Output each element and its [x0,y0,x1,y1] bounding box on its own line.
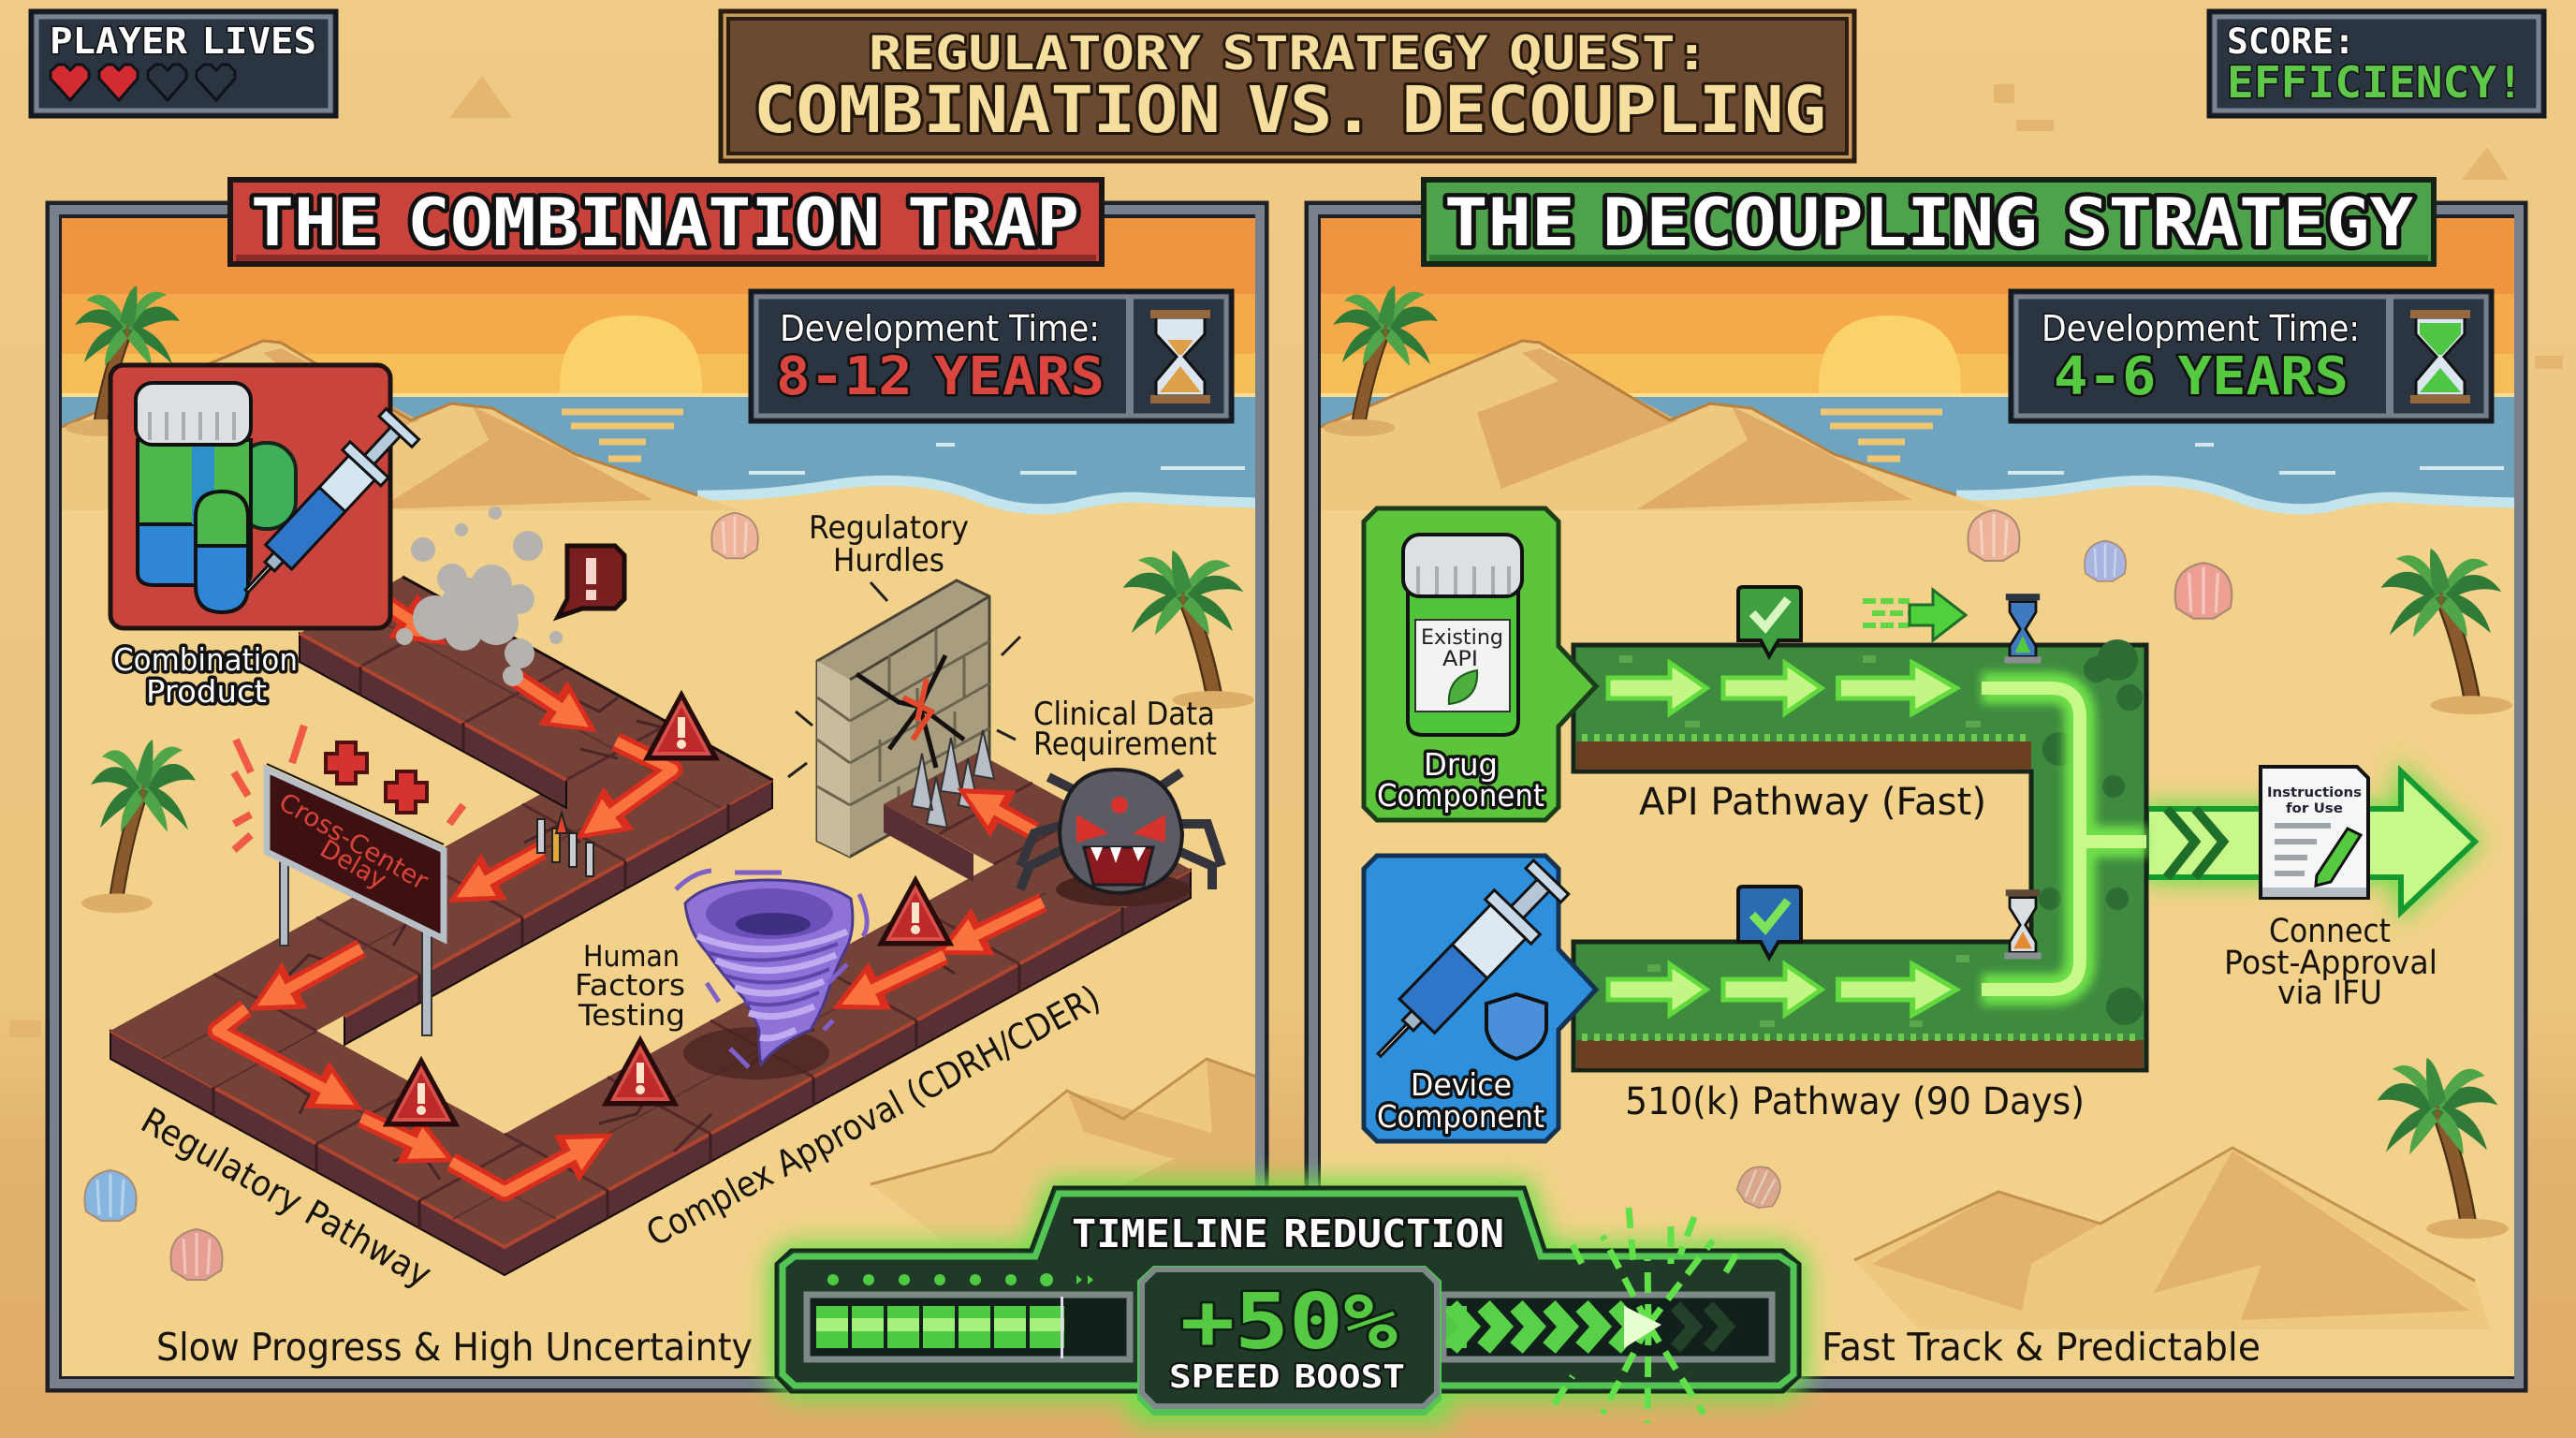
smoke cloud [330,506,563,686]
score panel [2209,11,2544,116]
path segment: middle stretch [110,724,772,1088]
existing API bottle [1403,535,1522,735]
red path arrows [217,599,1043,1192]
drug component tile [1364,508,1596,820]
score panel: SCORE: [2227,22,2355,62]
label: regulatory pathway: Regulatory Pathway [135,1100,438,1296]
title: timeline reduction: TIMELINE REDUCTION [1072,1211,1504,1256]
label: connect post-approval: Post-Approval [2224,945,2437,982]
syringe [227,406,421,609]
path segment: spider stretch [884,753,1191,921]
human factors tornado [676,871,867,1079]
label: regulatory hurdles: Regulatory [809,509,969,547]
label: human factors testing: Human [583,940,680,974]
caption: fast track: Fast Track & Predictable [1822,1325,2261,1370]
label: combination product [113,641,298,710]
player lives panel [31,11,336,116]
progress dots [827,1273,1093,1286]
medicine bottle [136,383,251,585]
label: regulatory hurdles [809,509,969,601]
boss spider [1020,770,1222,906]
palm trees [66,286,1254,913]
instructions for use document [2261,767,2368,898]
panel: combination trap [54,180,1260,1384]
left progress bar [807,1295,1130,1359]
label: API pathway: API Pathway (Fast) [1639,781,1986,824]
label: human factors testing: Testing [578,999,685,1033]
label: complex approval: Complex Approval (CDRH/CDER) [639,977,1106,1255]
decorative sand marks [9,76,2563,1037]
hearts [51,65,235,100]
drug component tile: Component [1377,777,1544,814]
right panel scene [1321,218,2515,1376]
icon: hourglass green [2410,310,2470,404]
icon: hourglass [1150,310,1210,404]
device component tile: Device [1411,1066,1512,1103]
shield [1486,994,1546,1059]
capsule [196,492,248,612]
sparks [1554,1208,1736,1423]
device syringe [1356,855,1573,1078]
stone wall: regulatory hurdles [788,580,1020,857]
flame spikes [537,813,593,876]
label: connect post-approval: via IFU [2277,975,2382,1012]
drug component tile: Drug [1424,746,1498,783]
device component tile [1356,855,1596,1141]
cross-center delay sign: Delay [315,834,391,895]
timeline reduction HUD [776,1187,1800,1423]
speed boost box [1137,1266,1442,1416]
label: clinical data requirement [1033,696,1217,763]
right chevron bar [1443,1295,1772,1359]
instructions for use document: for Use [2286,801,2343,816]
label: combination product: Product [146,673,267,710]
path segment: upper stretch [300,577,772,837]
shells [84,513,758,1280]
existing API bottle: API [1442,648,1478,671]
instructions for use document: Instructions [2267,785,2362,800]
development time panel: 8-12 years: 8-12 YEARS [776,346,1105,407]
merged output arrow [2146,771,2475,912]
checkpoint badge: blue [1738,887,1801,958]
palm trees [1324,286,2512,1239]
left panel frame [54,210,1260,1384]
small hourglass: green [2004,594,2042,663]
main title plaque: REGULATORY STRATEGY QUEST: [869,26,1708,81]
development time panel: 4-6 years [2011,291,2492,421]
development time panel: 4-6 years: Development Time: [2042,308,2360,349]
label: clinical data requirement: Clinical Data [1033,696,1215,733]
right panel frame [1313,210,2519,1384]
pathway arrows [1608,663,1956,1015]
development time panel: 8-12 years [751,291,1232,421]
label: human factors testing: Factors [575,969,685,1003]
icon: combination product [110,365,421,628]
panel: decoupling strategy [1313,180,2519,1384]
panel heading: the combination trap: THE COMBINATION TRAP [251,184,1079,261]
path segment: lower stretches [110,813,1191,1275]
label: connect post-approval [2224,913,2437,1012]
label: clinical data requirement: Requirement [1033,726,1217,763]
pathway grass block [1573,639,2146,1070]
warning triangles [387,695,950,1124]
label: combination product: Combination [113,641,298,678]
development time panel: 4-6 years: 4-6 YEARS [2054,346,2349,407]
caption: slow progress: Slow Progress & High Uncertainty [156,1325,753,1370]
spikes [912,730,994,828]
glowing pathway line [1982,688,2146,990]
cross-center delay sign: Cross-Center [273,787,433,897]
player lives panel: PLAYER LIVES [50,21,316,62]
small hourglass: orange [2004,889,2042,959]
main title plaque [721,11,1854,161]
cross-center delay sign [267,764,444,1035]
label: connect post-approval: Connect [2269,913,2391,950]
panel heading: the decoupling strategy: THE DECOUPLING STRATEGY [1444,184,2413,261]
left panel scene [62,218,1256,1376]
speed arrow [1863,590,1966,640]
speech bubble alert [558,546,624,617]
development time panel: 8-12 years: Development Time: [780,308,1100,349]
main title plaque: COMBINATION VS. DECOUPLING [754,73,1826,148]
label: regulatory hurdles: Hurdles [833,542,944,580]
red crosses and stress marks [234,726,463,850]
shells [1733,510,2232,1213]
checkpoint badge: green [1738,587,1801,656]
isometric regulatory pathway [110,506,1222,1275]
device component tile: Component [1377,1098,1544,1135]
label: human factors testing [575,940,685,1033]
score panel: EFFICIENCY! [2227,57,2524,108]
speed boost box: +50% [1180,1278,1398,1367]
existing API bottle: Existing [1421,626,1503,650]
label: 510(k) pathway: 510(k) Pathway (90 Days) [1625,1080,2085,1123]
speed boost box: SPEED BOOST [1169,1358,1405,1396]
green capsule behind [238,443,296,529]
